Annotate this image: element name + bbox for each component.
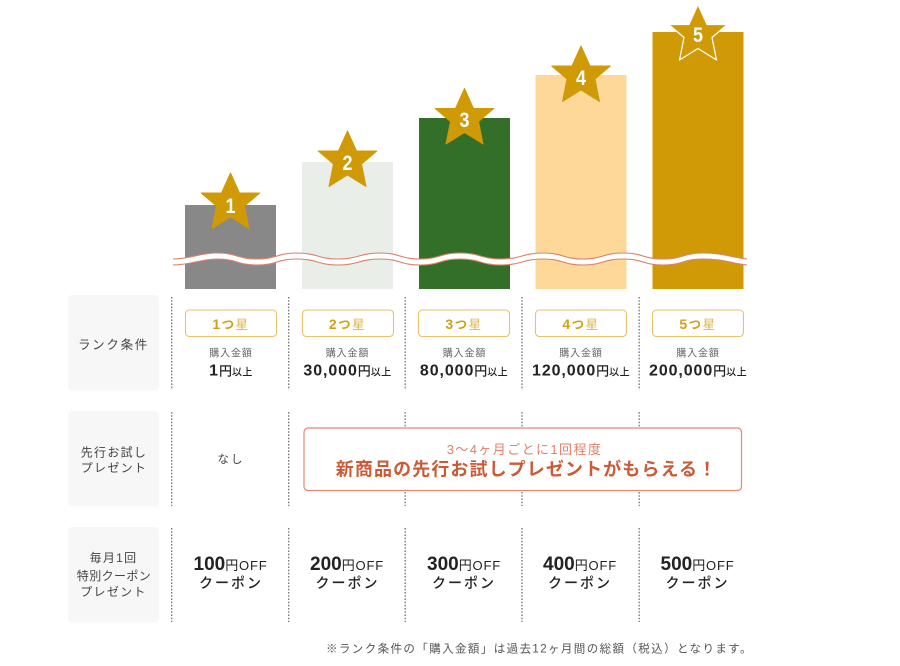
rank 2 condition (302, 310, 394, 380)
callout: trial gift for ranks 2 to 5: 3～4ヶ月ごとに1回程度 (447, 442, 602, 457)
row heading: monthly coupon (68, 527, 159, 622)
star 4: 4 (576, 67, 586, 90)
star 1 (201, 173, 260, 228)
star 5 (669, 4, 727, 60)
rank 5 condition: 200,000円以上 (649, 362, 747, 380)
star 2: 2 (342, 152, 352, 175)
star 2 (318, 131, 377, 186)
star 1: 1 (226, 195, 236, 218)
column dividers (172, 297, 639, 622)
row heading: monthly coupon: 毎月1回 (90, 550, 137, 565)
rank 1 condition (186, 310, 276, 380)
row 3: monthly coupon (68, 527, 734, 622)
rank 4 condition: 120,000円以上 (532, 362, 630, 380)
rank 2 condition: 2つ星 (329, 316, 366, 332)
rank 5 condition: 5つ星 (679, 316, 717, 332)
rank 5 condition: 購入金額 (676, 346, 720, 360)
bar: rank 3 (419, 118, 510, 289)
row heading: advance trial gift: プレゼント (81, 461, 147, 475)
star 5: 5 (693, 24, 703, 47)
callout: trial gift for ranks 2 to 5: 新商品の先行お試しプレゼントがもらえる！ (336, 458, 717, 480)
row 1: rank conditions (68, 295, 747, 390)
coupon rank 1: クーポン (199, 575, 263, 591)
coupon rank 2: 200円OFF (310, 554, 384, 575)
rank 4 condition (532, 310, 630, 380)
rank 2 condition: 購入金額 (326, 346, 369, 360)
bar: rank 5 (652, 32, 744, 289)
coupon rank 5: クーポン (666, 575, 730, 591)
coupon rank 1: 100円OFF (194, 554, 267, 575)
bar: rank 2 (302, 162, 393, 289)
rank 3 condition (418, 310, 510, 380)
coupon rank 5 (661, 554, 734, 591)
rank 4 condition: 購入金額 (559, 346, 603, 360)
rank 1: none: なし (218, 453, 244, 466)
coupon rank 4 (543, 554, 617, 591)
row heading: monthly coupon: 特別クーポン (77, 568, 151, 583)
bar chart (173, 4, 747, 289)
coupon rank 2 (310, 554, 384, 591)
row heading: advance trial gift: 先行お試し (81, 446, 147, 460)
coupon rank 2: クーポン (316, 575, 380, 591)
row heading: advance trial gift (68, 411, 159, 506)
coupon rank 4: 400円OFF (543, 554, 617, 575)
star 4 (552, 46, 610, 102)
coupon rank 3: 300円OFF (427, 554, 501, 575)
star 3: 3 (460, 109, 470, 132)
coupon rank 3: クーポン (432, 575, 496, 591)
row heading: monthly coupon: プレゼント (80, 585, 147, 599)
coupon rank 4: クーポン (548, 575, 612, 591)
star 3 (435, 88, 494, 144)
rank 1 condition: 1円以上 (209, 362, 253, 380)
rank 1 condition: 1つ星 (212, 316, 250, 332)
footnote: ※ランク条件の「購入金額」は過去12ヶ月間の総額（税込）となります。 (326, 642, 753, 656)
rank 1 condition: 購入金額 (209, 346, 253, 360)
rank 3 condition: 3つ星 (445, 316, 483, 332)
bar: rank 4 (536, 75, 626, 289)
axis break wave (173, 253, 747, 265)
row heading: rank conditions (68, 295, 159, 390)
coupon rank 5: 500円OFF (661, 554, 734, 575)
rank 3 condition: 購入金額 (443, 346, 486, 360)
rank 4 condition: 4つ星 (562, 316, 600, 332)
coupon rank 3 (427, 554, 501, 591)
callout: trial gift for ranks 2 to 5 (304, 428, 742, 490)
row 2: advance trial gift (68, 411, 742, 506)
coupon rank 1 (194, 554, 267, 591)
bar: rank 1 (185, 205, 276, 289)
rank 3 condition: 80,000円以上 (420, 362, 508, 380)
row heading: rank conditions: ランク条件 (78, 338, 149, 352)
rank 5 condition (649, 310, 747, 380)
rank 2 condition: 30,000円以上 (303, 362, 392, 380)
